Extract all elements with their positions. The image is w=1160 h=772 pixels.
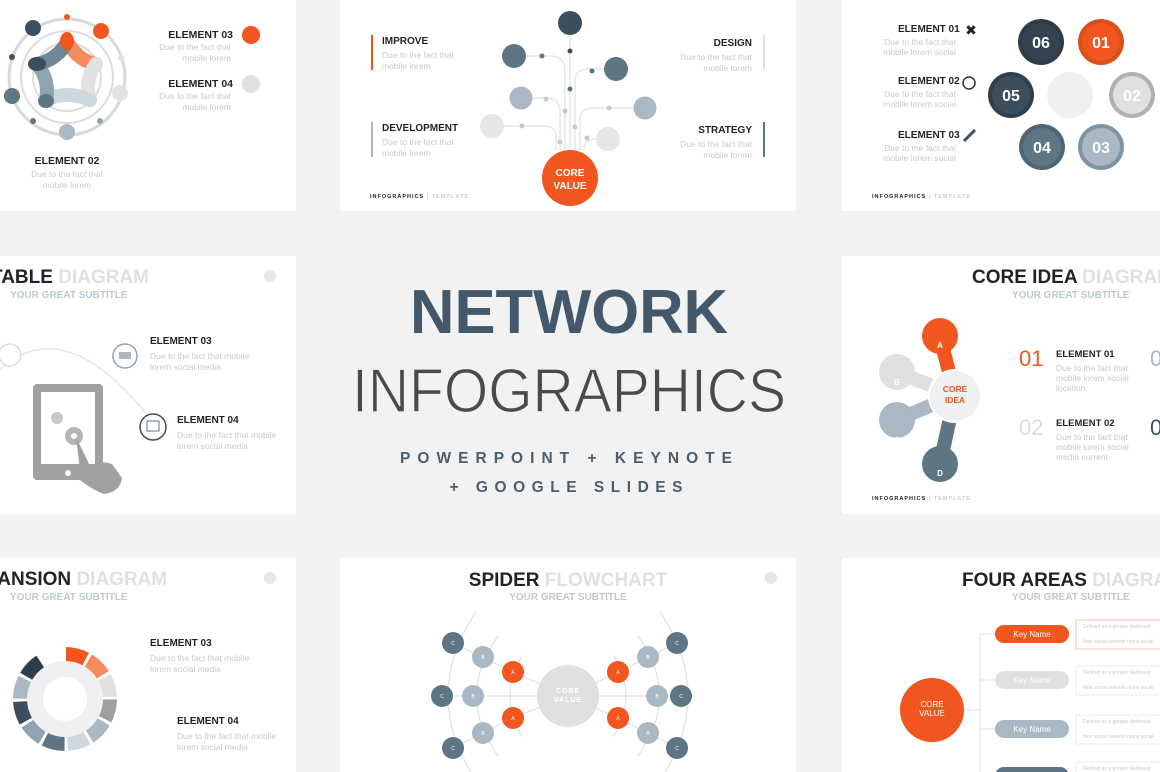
panel: spider flowchart: B — [646, 655, 650, 661]
panel: core value tree: Due to the fact that — [382, 137, 454, 147]
title block: POWERPOINT + KEYNOTE — [400, 450, 732, 467]
panel: tablet diagram: Due to the fact that mobile — [150, 351, 249, 361]
text: element 04: Due to the fact that — [159, 91, 232, 101]
panel: core value tree: mobile lorem — [382, 61, 431, 71]
panel: spider flowchart: C — [675, 641, 679, 647]
panel: expansion diagram: ELEMENT 04 — [177, 716, 239, 727]
panel: core idea: mobile lorem social — [1056, 442, 1129, 452]
panel: four areas: their social network many social — [1083, 685, 1154, 691]
panel: core idea: ELEMENT 01 — [1056, 349, 1115, 360]
panel: core value tree: DESIGN — [714, 38, 752, 49]
panel: four areas: their social network many social — [1083, 639, 1154, 645]
panel: core idea: D — [937, 469, 943, 478]
panel: six circles — [842, 0, 1160, 211]
panel: core idea — [842, 256, 1160, 514]
panel: tablet diagram: ELEMENT 03 — [150, 336, 212, 347]
text: element 03 — [159, 29, 233, 63]
panel: expansion diagram: Due to the fact that mobile — [177, 731, 276, 741]
text: element 04: mobile lorem — [182, 102, 231, 112]
panel: tablet diagram: Due to the fact that mobile — [177, 430, 276, 440]
panel: six circles: ✖ — [965, 22, 977, 38]
panel: core idea: 02 — [1019, 415, 1043, 440]
panel: four areas: Defined as a greater likelihood — [1083, 624, 1151, 630]
panel: tablet diagram — [0, 256, 296, 514]
panel: expansion diagram: Due to the fact that mobile — [150, 653, 249, 663]
panel: six circles: 02 — [1123, 88, 1141, 105]
panel: six circles: mobile lorem social — [883, 99, 956, 109]
ring icons — [64, 14, 70, 20]
panel: core idea: CORE — [943, 384, 968, 394]
title block: INFOGRAPHICS — [352, 357, 786, 426]
panel: spider flowchart: A — [616, 716, 620, 722]
panel: six circles: ELEMENT 03 — [898, 130, 960, 141]
text: element 02: Due to the fact that — [31, 169, 104, 179]
panel: core idea: Due to the fact that — [1056, 432, 1128, 442]
panel: spider flowchart: B — [655, 694, 659, 700]
text: element 02: ELEMENT 02 — [35, 155, 100, 167]
panel: expansion diagram — [0, 558, 296, 772]
panel: core idea: C — [894, 436, 900, 445]
panel: spider flowchart: C — [451, 641, 455, 647]
core value circle: VALUE — [553, 181, 587, 192]
panel: tablet diagram: ELEMENT 04 — [177, 415, 239, 426]
panel: core idea: B — [894, 378, 900, 387]
core value circle — [542, 150, 598, 206]
panel: core idea: ELEMENT 02 — [1056, 418, 1115, 429]
panel: tablet diagram: lorem social media — [150, 362, 221, 372]
star blobs — [37, 42, 96, 100]
text: element 02: mobile lorem — [43, 180, 91, 190]
panel: top-left cycle diagram — [0, 0, 296, 211]
text: element 03: ELEMENT 03 — [168, 29, 233, 41]
panel: core value tree: STRATEGY — [698, 125, 752, 136]
text: element 02 — [31, 155, 104, 190]
panel: four areas: Key Name — [1013, 630, 1051, 639]
panel: core idea: A — [937, 341, 943, 350]
panel: spider flowchart: B — [646, 731, 650, 737]
panel: four areas: Key Name — [1013, 725, 1051, 734]
panel: expansion diagram: lorem social media — [150, 664, 221, 674]
tablet icon — [33, 384, 122, 494]
panel: core idea: IDEA — [945, 395, 965, 405]
panel: spider flowchart: A — [511, 716, 515, 722]
panel: spider flowchart: CORE — [556, 688, 580, 695]
panel: six circles: 06 — [1032, 35, 1050, 52]
panel: four areas: YOUR GREAT SUBTITLE — [1012, 592, 1130, 603]
panel: core value tree: mobile lorem — [703, 63, 752, 73]
panel: spider flowchart: A — [511, 670, 515, 676]
panel: six circles: ELEMENT 01 — [898, 24, 960, 35]
panel: core idea: YOUR GREAT SUBTITLE — [1012, 290, 1130, 301]
panel: four areas: Defined as a greater likelihood — [1083, 670, 1151, 676]
panel: six circles: 05 — [1002, 88, 1020, 105]
panel: core idea: INFOGRAPHICS | TEMPLATE — [872, 496, 971, 502]
panel: core idea: 01 — [1019, 346, 1043, 371]
icons — [558, 11, 582, 35]
panel: six circles: 04 — [1033, 140, 1051, 157]
panel: core value tree: INFOGRAPHICS | TEMPLATE — [370, 194, 469, 200]
panel: spider flowchart: YOUR GREAT SUBTITLE — [509, 592, 627, 603]
panel: core value tree: Due to the fact that — [680, 52, 753, 62]
title block: + GOOGLE SLIDES — [450, 479, 682, 496]
panel: four areas: their social network many social — [1083, 734, 1154, 740]
title block: NETWORK — [410, 278, 728, 347]
panel: four areas: Defined as a greater likelihood — [1083, 719, 1151, 725]
panel: spider flowchart: C — [451, 746, 455, 752]
panel: spider flowchart: B — [481, 655, 485, 661]
panel: spider flowchart: C — [679, 694, 683, 700]
panel: spider flowchart: B — [471, 694, 475, 700]
panel: expansion diagram: lorem social media — [177, 742, 248, 752]
text: element 04: ELEMENT 04 — [168, 78, 233, 90]
panel: spider flowchart: B — [481, 731, 485, 737]
panel: core value tree — [340, 0, 796, 211]
text: element 03: Due to the fact that — [159, 42, 232, 52]
panel: core value tree: mobile lorem — [382, 148, 431, 158]
panel: core idea: media current — [1056, 452, 1109, 462]
panel: four areas: CORE — [920, 700, 944, 709]
text: element 04 — [159, 78, 233, 112]
panel: four areas — [842, 558, 1160, 772]
panel: spider flowchart: SPIDER FLOWCHART — [469, 570, 668, 591]
panel: six circles: Due to the fact that — [884, 89, 957, 99]
panel: six circles: 03 — [1092, 140, 1110, 157]
panel: core idea: mobile lorem social — [1056, 373, 1129, 383]
panel: core idea: Due to the fact that — [1056, 363, 1128, 373]
panel: six circles: mobile lorem social — [883, 153, 956, 163]
title block — [352, 278, 786, 496]
text: element 03: mobile lorem — [182, 53, 231, 63]
panel: six circles: ELEMENT 02 — [898, 76, 960, 87]
labels — [371, 35, 373, 70]
panel: expansion diagram: YOUR GREAT SUBTITLE — [10, 592, 128, 603]
panel: core value tree: DEVELOPMENT — [382, 123, 458, 134]
panel: core value tree: mobile lorem — [703, 150, 752, 160]
core value circle: CORE — [556, 168, 585, 179]
panel: six circles: INFOGRAPHICS | TEMPLATE — [872, 194, 971, 200]
panel: spider flowchart — [340, 558, 796, 772]
panel: core value tree: Due to the fact that — [382, 50, 454, 60]
panel: core value tree: Due to the fact that — [680, 139, 753, 149]
panel: six circles: mobile lorem social — [883, 47, 956, 57]
panel: six circles: 01 — [1092, 35, 1110, 52]
panel: expansion diagram: ELEMENT 03 — [150, 638, 212, 649]
panel: core value tree: IMPROVE — [382, 36, 428, 47]
panel: spider flowchart: VALUE — [554, 697, 582, 704]
panel: spider flowchart: C — [440, 694, 444, 700]
panel: tablet diagram: YOUR GREAT SUBTITLE — [10, 290, 128, 301]
panel: four areas: Defined as a greater likelihood — [1083, 766, 1151, 772]
panel: core idea: location — [1056, 383, 1086, 393]
panel: six circles: Due to the fact that — [884, 143, 957, 153]
panel: four areas: Key Name — [1013, 676, 1051, 685]
panel: spider flowchart: C — [675, 746, 679, 752]
panel: tablet diagram: lorem social media — [177, 441, 248, 451]
panel: four areas: VALUE — [919, 709, 945, 718]
panel: six circles: Due to the fact that — [884, 37, 957, 47]
panel: spider flowchart: A — [616, 670, 620, 676]
